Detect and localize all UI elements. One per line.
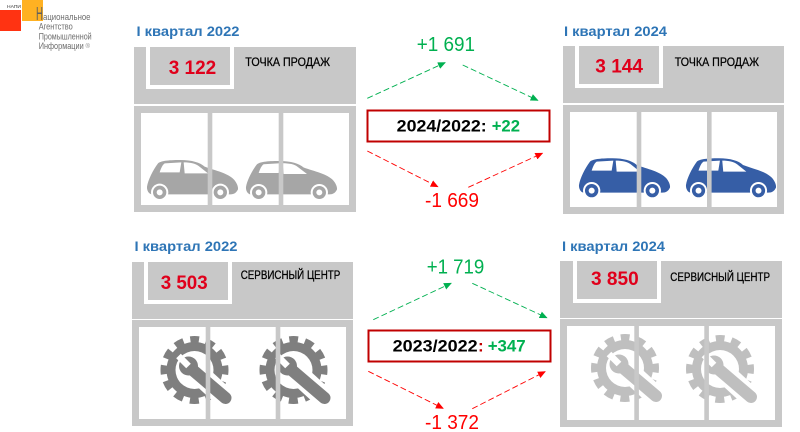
logo: Агентство — [39, 22, 73, 32]
arrow: red down — [368, 371, 443, 408]
comparison box: +347 — [488, 337, 526, 356]
increase value: +1 691 — [417, 34, 475, 56]
panel: sales change — [367, 34, 550, 212]
heading: I квартал 2022 — [136, 23, 240, 39]
value: 3 122 — [169, 58, 216, 79]
icon: car — [246, 161, 337, 201]
value: 3 850 — [591, 269, 639, 290]
logo: Н — [36, 4, 43, 24]
label: СЕРВИСНЫЙ ЦЕНТР — [241, 269, 341, 282]
heading: I квартал 2022 — [134, 238, 238, 254]
logo: ациональное — [43, 12, 90, 23]
icon: gear and wrench — [263, 340, 330, 403]
icon: car — [579, 158, 670, 199]
panel: service change — [368, 256, 550, 432]
decrease value: -1 669 — [425, 190, 479, 212]
comparison box: 2023/2022 — [393, 337, 478, 356]
label: ТОЧКА ПРОДАЖ — [245, 57, 330, 69]
comparison box — [368, 110, 550, 142]
comparison box: 2024/2022: — [397, 117, 487, 136]
arrow: red up — [468, 153, 542, 187]
icon: car — [686, 158, 776, 199]
increase value: +1 719 — [427, 256, 484, 278]
arrow: green up — [367, 63, 445, 98]
arrow: green up — [373, 283, 451, 320]
arrow: green down — [463, 65, 538, 100]
logo: Информации — [39, 41, 84, 52]
icon: car — [147, 160, 238, 201]
logo: НАПИ — [7, 4, 21, 9]
icon: gear and wrench — [594, 338, 661, 401]
heading: I квартал 2024 — [564, 23, 667, 39]
comparison box — [368, 330, 550, 362]
logo: ® — [86, 43, 90, 50]
comparison box: +22 — [492, 117, 520, 136]
panel: service centres Q1 2024 — [560, 238, 782, 427]
arrow: red down — [367, 151, 438, 187]
heading: I квартал 2024 — [562, 238, 665, 254]
panel: sales points Q1 2022 — [134, 23, 356, 212]
panel: sales points Q1 2024 — [563, 23, 784, 214]
arrow: red up — [472, 372, 545, 409]
icon: gear and wrench — [164, 340, 230, 403]
comparison box: : — [478, 337, 484, 356]
arrow: green down — [472, 283, 547, 318]
icon: gear and wrench — [690, 338, 756, 402]
logo: Промышленной — [39, 32, 92, 42]
label: СЕРВИСНЫЙ ЦЕНТР — [670, 271, 770, 284]
logo — [0, 0, 92, 52]
label: ТОЧКА ПРОДАЖ — [675, 57, 759, 69]
value: 3 503 — [161, 273, 208, 294]
panel: service centres Q1 2022 — [132, 238, 353, 426]
value: 3 144 — [595, 56, 643, 77]
